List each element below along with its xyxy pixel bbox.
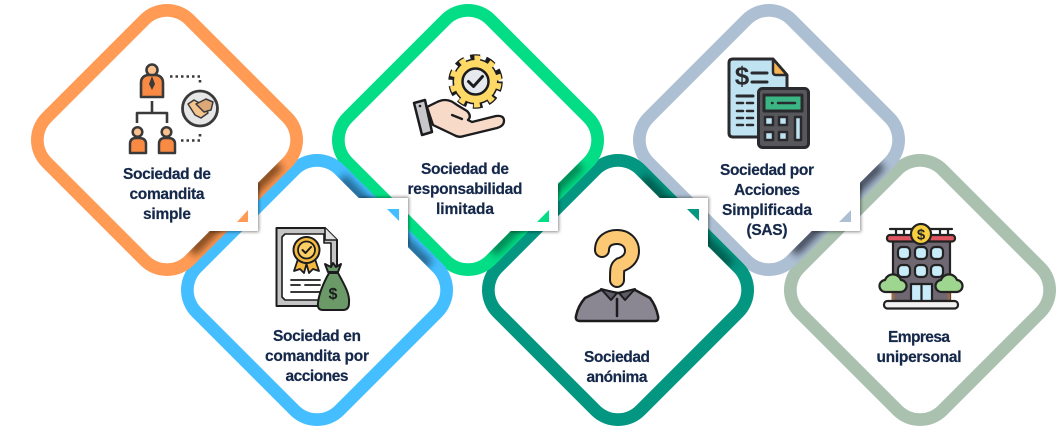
label: comandita por (265, 348, 369, 365)
diamond ring: grey-blue (633, 4, 905, 276)
label: anónima (586, 369, 648, 386)
icon: certificate and money bag: $ (329, 286, 338, 303)
label: comandita (130, 186, 205, 203)
icon: hand holding gear (414, 58, 504, 137)
icon: invoice and calculator (729, 59, 808, 148)
label: Sociedad (584, 349, 650, 366)
label: Sociedad de (421, 161, 509, 178)
panel: Empresa unipersonal (768, 138, 1059, 429)
label: limitada (436, 201, 494, 218)
diamond ring: sage (768, 138, 1059, 429)
fold accent (839, 210, 851, 222)
fold corner (652, 198, 708, 254)
diamond ring: green (332, 4, 604, 276)
label: Sociedad de (123, 166, 211, 183)
label: Simplificada (722, 202, 812, 219)
label: unipersonal (876, 349, 962, 366)
label: (SAS) (746, 222, 788, 239)
diamond ring: teal (482, 154, 754, 426)
fold accent (687, 209, 699, 221)
diamond ring: orange (31, 4, 303, 276)
icon: partners organisation chart and handshake (130, 64, 218, 153)
diamond ring: blue (181, 154, 453, 426)
label: simple (143, 206, 191, 223)
label: acciones (286, 368, 348, 385)
panel: Sociedad por Acciones Simplificada (633, 4, 905, 276)
panel: Sociedad de comandita simple (31, 4, 303, 276)
label: Empresa (888, 329, 950, 346)
fold accent (237, 210, 248, 222)
panel: Sociedad de responsabilidad limitada (332, 4, 604, 276)
fold accent (537, 210, 549, 222)
icon: invoice and calculator: $ (735, 61, 750, 91)
label: responsabilidad (408, 181, 522, 198)
panel: Sociedad en comandita por acciones (181, 154, 453, 426)
fold corner (502, 175, 558, 231)
panel: Sociedad anónima (482, 154, 754, 426)
icon: certificate and money bag (276, 228, 349, 310)
icon: office building: $ (917, 226, 926, 244)
label: Sociedad en (273, 328, 361, 345)
label: Sociedad por (720, 162, 814, 179)
fold corner (352, 198, 408, 254)
fold corner (804, 175, 860, 231)
fold corner (201, 175, 258, 231)
fold accent (387, 209, 399, 221)
icon: office building (879, 224, 963, 308)
icon: question-mark head and torso (576, 237, 658, 321)
label: Acciones (734, 182, 800, 199)
